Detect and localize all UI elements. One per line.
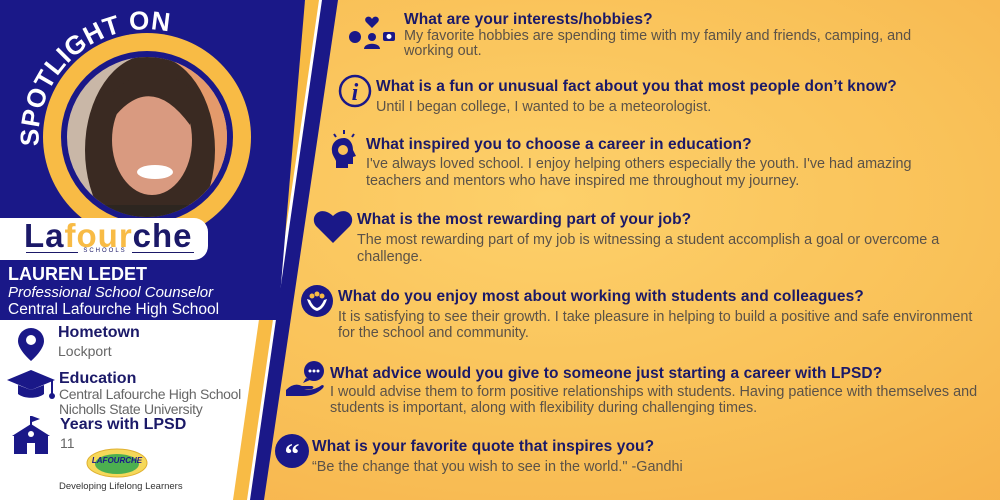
logo: Lafourche Schools: Lafourche: [24, 217, 193, 254]
Q3 inspired: What inspired you to choose a career in education?: [366, 136, 752, 153]
name block: LAUREN LEDET: [8, 264, 147, 284]
info: years with LPSD: Years with LPSD: [60, 416, 186, 433]
info: education: Central Lafourche High School: [59, 386, 241, 402]
Q7 quote: [312, 438, 683, 475]
Q1 hobbies: working out.: [404, 43, 482, 59]
photo with ring: [20, 11, 251, 224]
info: hometown: Hometown: [58, 324, 140, 341]
Q2 fun fact: [376, 78, 897, 115]
name block: Central Lafourche High School: [8, 301, 219, 318]
Q6 advice: students is important, along with flexibility during challenging times.: [330, 400, 757, 416]
Q3 inspired: teachers and mentors who have inspired me throughout my journey.: [366, 173, 799, 189]
Q2 fun fact: What is a fun or unusual fact about you that most people don’t know?: [376, 78, 897, 95]
icon: heart: [314, 211, 352, 243]
info: education: Education: [59, 370, 136, 387]
icon: school house: [12, 416, 50, 454]
logo: district seal: LAFOURCHE: [92, 456, 143, 465]
Q6 advice: [330, 365, 977, 416]
icon: grad cap: [7, 370, 55, 399]
Q7 quote: “Be the change that you wish to see in the world." -Gandhi: [312, 459, 683, 475]
Q4 rewarding: What is the most rewarding part of your job?: [357, 211, 691, 228]
info: years with LPSD: [12, 416, 186, 454]
Q6 advice: What advice would you give to someone just starting a career with LPSD?: [330, 365, 882, 382]
Q1 hobbies: My favorite hobbies are spending time with my family and friends, camping, and: [404, 28, 911, 44]
icon: location pin: [18, 328, 44, 361]
Q3 inspired: I've always loved school. I enjoy helping others especially the youth. I've had amazing: [366, 156, 911, 172]
Q3 inspired: [366, 136, 911, 189]
Q5 enjoy: for the school and community.: [338, 325, 529, 341]
Q7 quote: What is your favorite quote that inspires you?: [312, 438, 654, 455]
Q1 hobbies: What are your interests/hobbies?: [404, 11, 653, 28]
name block: Professional School Counselor: [8, 284, 213, 301]
info: hometown: [18, 324, 140, 361]
icon: quote: [275, 434, 309, 469]
info: education: [7, 370, 241, 417]
info: years with LPSD: 11: [60, 435, 75, 451]
icon: info: [338, 74, 372, 108]
logo: Lafourche Schools: [0, 218, 208, 260]
Q6 advice: I would advise them to form positive relationships with students. Having patience with themselves and: [330, 384, 977, 400]
name block: [8, 264, 219, 318]
tagline: Developing Lifelong Learners: [59, 481, 183, 492]
Q4 rewarding: [357, 211, 940, 265]
icon: speech hand: [286, 361, 324, 396]
Q5 enjoy: What do you enjoy most about working with students and colleagues?: [338, 288, 864, 305]
icon: hands circle: [301, 285, 333, 317]
icon: info: i: [352, 80, 359, 106]
icon: hobbies: [349, 16, 395, 49]
Q1 hobbies: [404, 11, 911, 59]
Q5 enjoy: [338, 288, 972, 341]
Q4 rewarding: The most rewarding part of my job is witnessing a student accomplish a goal or overcome a: [357, 232, 939, 248]
info: hometown: Lockport: [58, 343, 112, 359]
logo: district seal: [86, 448, 148, 478]
info: education: Nicholls State University: [59, 401, 202, 417]
icon: head: [332, 130, 356, 168]
Q2 fun fact: Until I began college, I wanted to be a meteorologist.: [376, 99, 711, 115]
Q4 rewarding: challenge.: [357, 249, 423, 265]
title: spotlight on: SPOTLIGHT ON: [20, 11, 170, 146]
Q5 enjoy: It is satisfying to see their growth. I take pleasure in helping to build a positive and safe environment: [338, 309, 972, 325]
logo: Lafourche Schools: SCHOOLS: [83, 248, 127, 254]
